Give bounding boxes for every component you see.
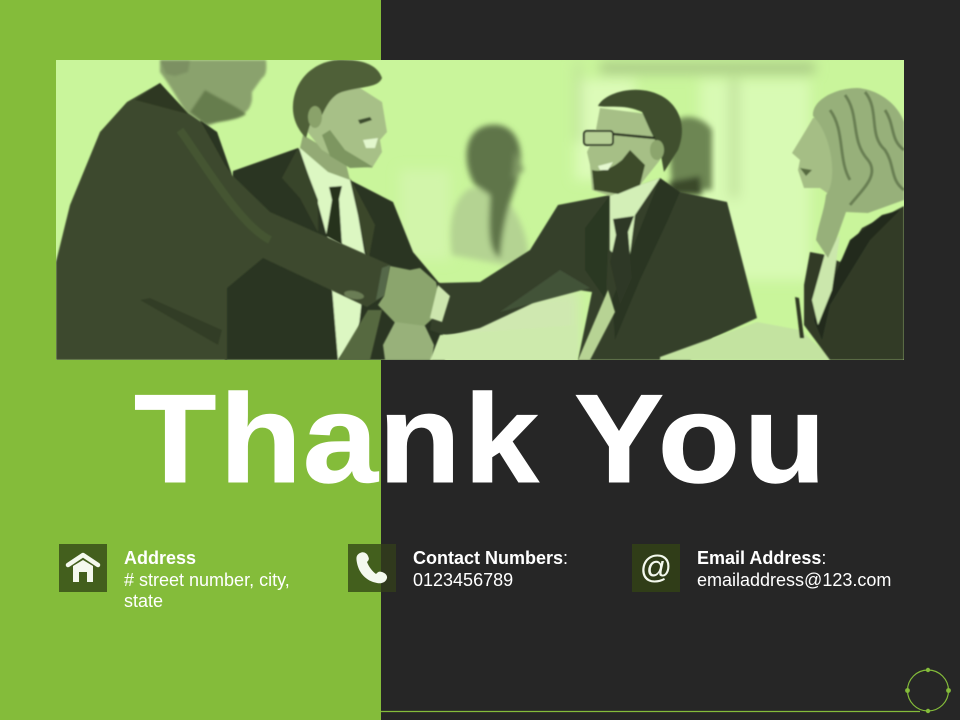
icon: house xyxy=(59,544,107,592)
middle man neck and head xyxy=(300,135,350,180)
background person behind bearded man xyxy=(668,117,712,195)
phone text xyxy=(413,548,568,590)
address text: # street number, city, xyxy=(124,570,290,590)
phone text: Contact Numbers: xyxy=(413,548,568,568)
left man head xyxy=(160,60,266,126)
icon: at sign: @ xyxy=(640,549,672,585)
lapels xyxy=(282,148,318,232)
glasses xyxy=(584,131,613,145)
icon: telephone xyxy=(348,544,396,592)
phone text: 0123456789 xyxy=(413,570,513,590)
background blur xyxy=(400,62,815,360)
woman suit xyxy=(804,206,904,360)
address text: state xyxy=(124,591,163,611)
address text xyxy=(124,548,290,611)
contact block: email xyxy=(632,544,891,592)
tie xyxy=(610,216,634,305)
panel: green left background xyxy=(0,0,381,720)
tie xyxy=(326,186,342,245)
middle man shirt xyxy=(299,148,366,360)
background woman xyxy=(451,125,528,265)
email text xyxy=(697,548,891,590)
bearded man shirt xyxy=(610,178,660,270)
decorative footer line and circle xyxy=(381,668,951,714)
email text: emailaddress@123.com xyxy=(697,570,891,590)
bearded man suit and arm xyxy=(430,90,757,360)
panel: dark right background xyxy=(381,0,960,720)
icon: at sign xyxy=(632,544,680,592)
middle man suit xyxy=(225,60,445,360)
woman xyxy=(792,88,904,360)
left man suit xyxy=(56,83,390,360)
handshake hands xyxy=(338,266,450,360)
contact block: phone xyxy=(348,544,568,592)
tablet and paper xyxy=(430,290,832,360)
photo: business people shaking hands, green duotone xyxy=(56,60,904,360)
woman hair xyxy=(813,88,904,258)
title: Thank You: Thank You xyxy=(134,368,826,509)
head xyxy=(587,108,660,196)
address text: Address xyxy=(124,548,196,568)
email text: Email Address: xyxy=(697,548,826,568)
contact block: address xyxy=(59,544,290,611)
pen xyxy=(795,297,804,338)
